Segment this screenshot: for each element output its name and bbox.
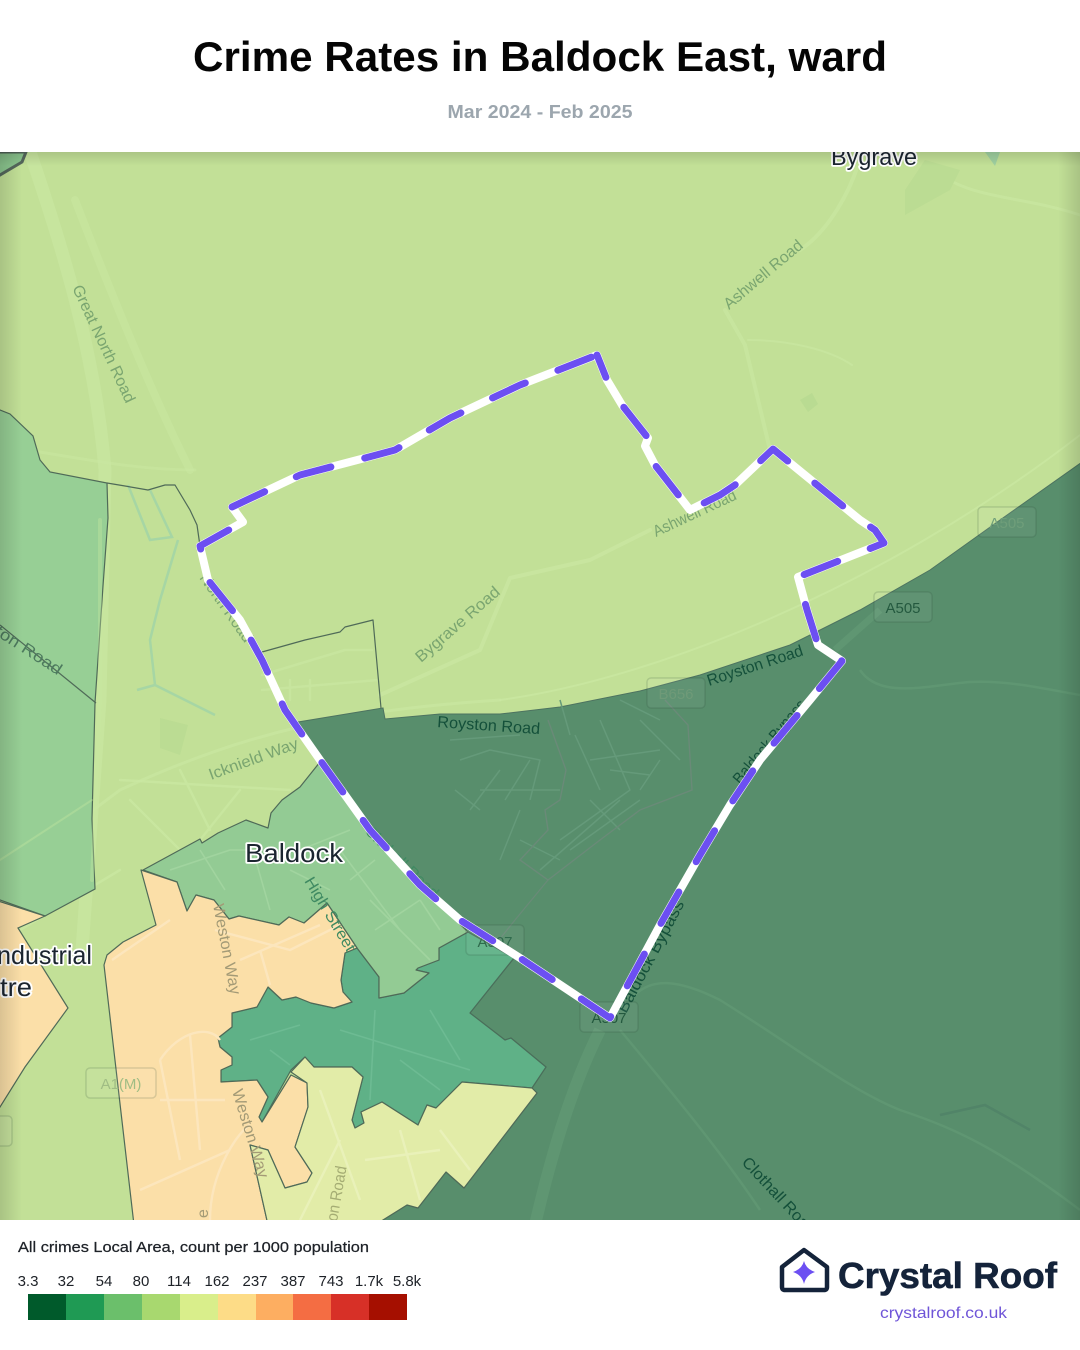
- road label: High Street: High Street: [301, 874, 359, 956]
- place label: Bygrave: Bygrave: [831, 144, 917, 171]
- road label: Great North Road: Great North Road: [68, 283, 138, 406]
- road shield: A1(M): A1(M): [101, 1076, 141, 1093]
- legend tick labels: 387: [280, 1273, 306, 1290]
- legend tick labels: 3.3: [18, 1273, 38, 1290]
- legend tick labels: 743: [318, 1273, 344, 1290]
- road label: fragment: e: [195, 1209, 212, 1218]
- ward boundary: Baldock East: [200, 355, 884, 1018]
- road shield: A505 west: A505: [885, 600, 921, 617]
- road shield: A505 east: [978, 507, 1036, 537]
- legend tick labels: 80: [133, 1273, 149, 1290]
- legend tick labels: [18, 1273, 422, 1290]
- map edge shading: [0, 152, 1080, 1220]
- road shield: B656: [647, 678, 705, 708]
- road label: Ashwell Road north: Ashwell Road: [721, 237, 807, 313]
- place label: Baldock: Baldock: [245, 838, 344, 868]
- road label: Baldock Bypass north: Baldock Bypass: [730, 697, 810, 788]
- icon: house with star: [782, 1250, 827, 1290]
- road label: Clothall Road: Clothall Road: [738, 1154, 819, 1239]
- legend: [18, 1239, 422, 1320]
- region: mid green Baldock south: [218, 932, 546, 1128]
- region: west peach area: [0, 900, 68, 1115]
- website link: crystalroof.co.uk: [880, 1305, 1008, 1322]
- road label: Ashwell Road south: Ashwell Road: [651, 487, 739, 541]
- road label: Royston Road east: Royston Road: [705, 643, 805, 690]
- region: lighter green Baldock centre: [143, 762, 468, 998]
- legend tick labels: 162: [204, 1273, 230, 1290]
- region: peach Baldock west: [104, 870, 357, 1225]
- road label: Weston Road fragment: on Road: [324, 1165, 351, 1223]
- road label: Bygrave Road: Bygrave Road: [412, 584, 504, 666]
- legend tick labels: 237: [242, 1273, 268, 1290]
- subtitle: date range: Mar 2024 - Feb 2025: [448, 102, 632, 122]
- logo: Crystal Roof: [782, 1250, 1058, 1322]
- legend tick labels: 1.7k: [355, 1273, 384, 1290]
- region: dark green east: [298, 460, 1080, 1225]
- road shield: cut-off left: [0, 1116, 12, 1146]
- ward outlines: [0, 483, 381, 708]
- road label: Royston Road west: Royston Road: [437, 714, 541, 738]
- road label: Weston Way north: Weston Way: [209, 903, 243, 996]
- road label: Clothall Road west: Clothall Road: [361, 823, 442, 902]
- place label: Centre fragment: tre: [0, 972, 32, 1002]
- road shield: A507 north: [466, 925, 524, 955]
- road shield: A505 east: A505: [989, 515, 1025, 532]
- legend tick labels: 54: [96, 1273, 112, 1290]
- road label: Icknield Way: Icknield Way: [207, 736, 301, 784]
- road shield: A507 south: A507: [591, 1010, 627, 1027]
- logo wordmark: Crystal Roof: [838, 1255, 1058, 1296]
- region: pale yellow Baldock south-east: [250, 1057, 537, 1225]
- road shield: A1(M): [86, 1068, 156, 1098]
- title: Crime Rates in Baldock East, ward: [193, 33, 887, 80]
- road label: North Road: North Road: [196, 571, 256, 646]
- road shield: A507 north: A507: [477, 934, 513, 951]
- road shield: A505 west: [874, 592, 932, 622]
- legend tick labels: 32: [58, 1273, 74, 1290]
- legend tick labels: 5.8k: [393, 1273, 422, 1290]
- region: north-west corner: [0, 152, 26, 178]
- legend colour scale: [28, 1294, 407, 1320]
- legend title: All crimes Local Area, count per 1000 population: [18, 1239, 369, 1256]
- road shield: B656: B656: [658, 686, 694, 703]
- road label: Baldock Bypass south: Baldock Bypass: [615, 898, 688, 1016]
- region: west green area: [0, 408, 108, 916]
- faint roads under regions: [0, 152, 1080, 950]
- faint streets inside districts: [0, 520, 1080, 1225]
- road shield: A507 south: [580, 1002, 638, 1032]
- legend tick labels: 114: [167, 1273, 191, 1290]
- road label: Weston Way south: Weston Way: [228, 1087, 271, 1180]
